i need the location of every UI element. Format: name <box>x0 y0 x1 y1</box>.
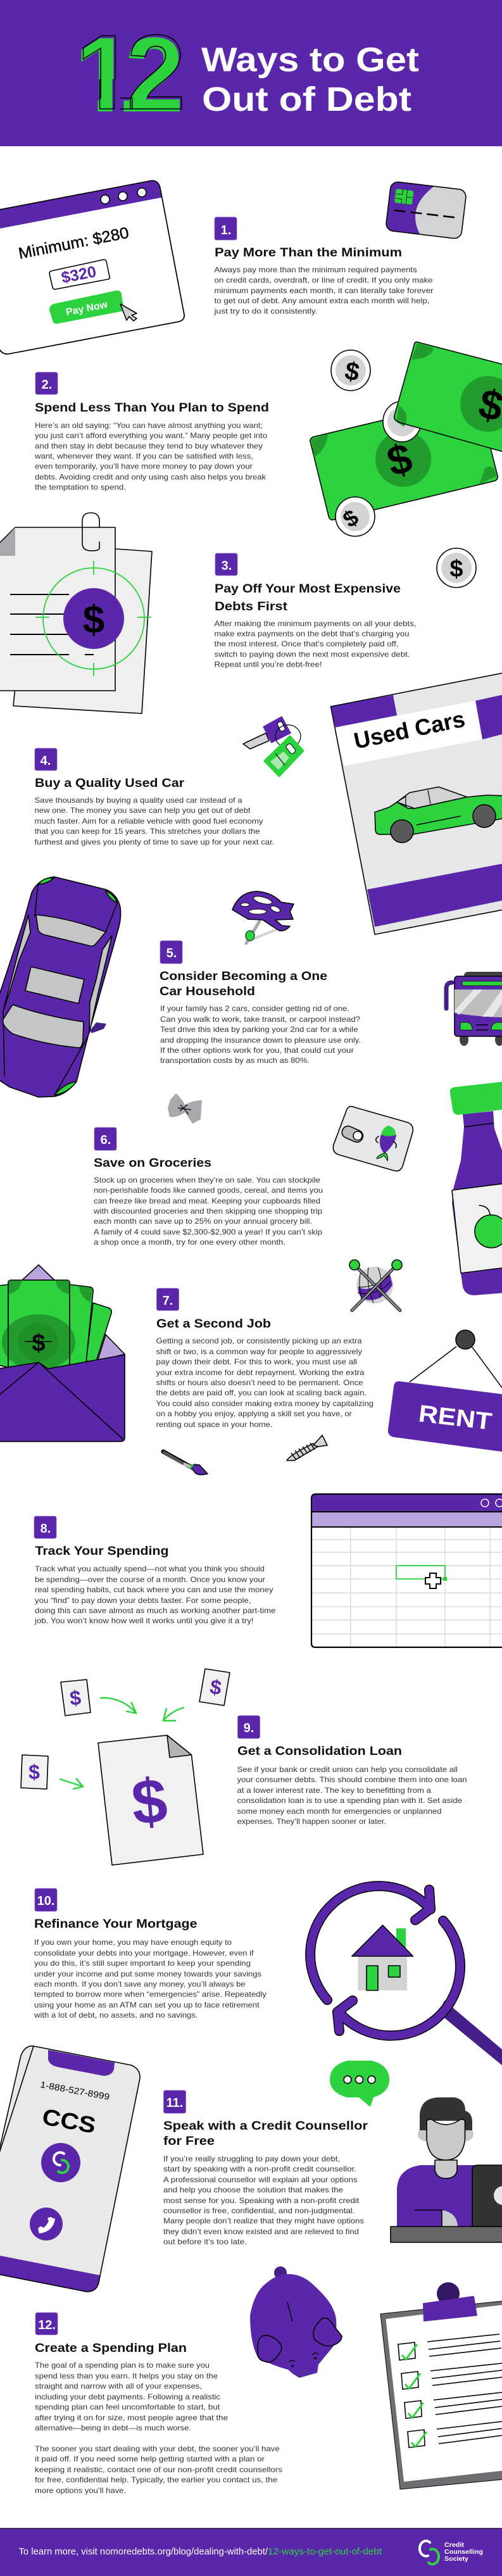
icon: sardine can <box>333 1107 413 1171</box>
heading 5: Consider Becoming a One <box>160 969 327 983</box>
badge 12 <box>35 2313 58 2335</box>
body 12: it paid off. If you need some help getting started with a plan or <box>35 2454 265 2463</box>
badge 1: 1. <box>221 223 231 237</box>
badge 9 <box>238 1716 260 1738</box>
badge 5 <box>160 941 182 964</box>
body 4: that you can keep for 15 years. This stretches your dollars the <box>34 827 260 836</box>
icon: speech bubble <box>330 2061 389 2107</box>
step 7 <box>156 1288 373 1429</box>
body 1: just try to do it consistently. <box>213 307 318 316</box>
heading 6: Save on Groceries <box>94 1156 211 1170</box>
badge 11 <box>163 2090 186 2113</box>
badge 7 <box>157 1288 179 1310</box>
body 3: the most interest. Once that’s completely paid off, <box>214 639 399 648</box>
body 2: Here’s an old saying: “You can have almost anything you want; <box>35 421 263 430</box>
arrow C <box>60 1778 83 1789</box>
large document: $ <box>129 1765 170 1838</box>
illustration: phone showing CCS: CCS <box>41 2104 97 2139</box>
illustration: credit card <box>386 181 467 239</box>
body 8 <box>34 1564 276 1625</box>
heading 3: Debts First <box>215 600 288 613</box>
body 4: Save thousands by buying a quality used car instead of a <box>34 796 242 805</box>
footer <box>0 2528 502 2576</box>
heading 11: for Free <box>163 2134 215 2148</box>
logo circle <box>41 2143 80 2182</box>
title: Ways to Get <box>201 41 419 79</box>
illustration: payment window: Pay Now <box>65 299 109 318</box>
body 10: If you own your home, you may have enough equity to <box>34 1938 232 1947</box>
badge 8 <box>34 1516 56 1538</box>
header banner <box>0 0 502 146</box>
body 12: for free, confidential help. Typically, the earlier you contact us, the <box>35 2475 277 2484</box>
body 10: under your income and put some money towards your savings <box>34 1970 261 1978</box>
heading 1: Pay More Than the Minimum <box>215 246 402 260</box>
small document A: $ <box>69 1686 82 1710</box>
body 4 <box>34 796 275 846</box>
illustration: used cars poster <box>330 672 502 934</box>
illustration: piggy bank <box>250 2266 342 2378</box>
body 12 <box>35 2361 282 2495</box>
body 5: Can you walk to work, take transit, or carpool instead? <box>160 1015 360 1024</box>
body 10: tempted to borrow more when “emergencies” arise. Repeatedly <box>34 1990 267 1999</box>
body 11 <box>163 2154 364 2246</box>
body 2 <box>34 421 267 492</box>
bill lower <box>310 398 498 520</box>
body 6: Stock up on groceries when they’re on sale. You can stockpile <box>94 1176 320 1184</box>
large document <box>98 1735 203 1865</box>
icon: bicycle helmet <box>232 891 294 943</box>
body 7 <box>156 1336 373 1429</box>
title <box>201 41 419 118</box>
body 9: See if your bank or credit union can help you consolidate all <box>237 1765 458 1774</box>
coin middle <box>383 401 421 442</box>
body 6: a shop once a month, try for one every other month. <box>94 1238 286 1247</box>
illustration: counsellor at desk <box>391 2097 502 2242</box>
small document B <box>199 1669 230 1706</box>
footer logo: Counselling <box>444 2548 483 2556</box>
small document B: $ <box>208 1675 223 1699</box>
small document A <box>61 1680 91 1716</box>
body 8: be spending—over the course of a month. Once you know your <box>35 1575 265 1584</box>
body 7: on a hobby you enjoy, applying a skill set you have, or <box>156 1409 352 1418</box>
body 1 <box>213 265 433 316</box>
body 7: the debts are paid off, you can look at scaling back again. <box>156 1388 367 1397</box>
badge 9: 9. <box>244 1721 254 1735</box>
body 1: on credit cards, overdraft, or line of credit. If you only make <box>214 275 433 284</box>
step 2 <box>34 372 269 492</box>
body 3: Repeat until you’re debt-free! <box>214 660 322 669</box>
body 1: Always pay more than the minimum required payments <box>214 265 417 274</box>
big number 12: 12 <box>74 15 184 134</box>
illustration: refinance house with arrows <box>310 1886 502 2069</box>
body 12: more options you’ll have. <box>35 2486 126 2495</box>
body 9: expenses. They’ll happen sooner or later. <box>237 1817 386 1826</box>
body 4: furthest and gives you plenty of time to save up for your next car. <box>34 838 275 846</box>
body 6: with discounted groceries and then skipping one shopping trip <box>93 1207 322 1216</box>
body 6 <box>93 1176 323 1247</box>
body 9: some money each month for emergencies or unplanned <box>237 1807 442 1816</box>
step 9 <box>237 1716 467 1826</box>
step 11 <box>163 2090 368 2246</box>
body 2: and then stay in debt because they tend to buy whatever they <box>35 442 263 451</box>
badge 8: 8. <box>41 1522 51 1536</box>
heading 8: Track Your Spending <box>35 1544 168 1558</box>
body 11: they didn’t even know existed and are relieved to find <box>163 2227 359 2236</box>
illustration: targeted debt papers: $ <box>83 598 104 642</box>
body 11: counsellor is free, confidential, and non-judgmental. <box>163 2206 355 2215</box>
body 10 <box>34 1938 267 2020</box>
badge 4 <box>35 748 57 770</box>
checklist items <box>398 2334 502 2447</box>
body 5: transportation costs by as much as 80%. <box>160 1056 310 1065</box>
body 5: Test drive this idea by parking your 2nd car for a while <box>160 1025 358 1034</box>
step 12 <box>35 2313 282 2495</box>
big number 12 <box>81 34 182 111</box>
illustration: phone showing CCS <box>0 2046 140 2292</box>
illustration: used cars poster: Used Cars <box>351 706 467 754</box>
body 7: your extra income for debt repayment. Working the extra <box>156 1368 365 1377</box>
body 6: non-perishable foods like canned goods, cereal, and items you <box>94 1186 323 1195</box>
icon: bus <box>446 972 502 1046</box>
heading 3: Pay Off Your Most Expensive <box>215 582 401 596</box>
badge 6: 6. <box>101 1133 111 1147</box>
badge 7: 7. <box>163 1294 173 1308</box>
big number 12: 12 <box>76 13 185 132</box>
heading 4: Buy a Quality Used Car <box>35 776 184 790</box>
icon: screw <box>287 1435 327 1461</box>
illustration: envelope full of money: $ <box>32 1330 46 1357</box>
badge 12: 12. <box>38 2318 56 2332</box>
body 7: You could also consider making extra money by capitalizing <box>156 1399 373 1408</box>
badge 2 <box>35 372 58 394</box>
body 12: keeping it realistic, contact one of our non-profit credit counsellors <box>35 2465 282 2474</box>
heading 11: Speak with a Credit Counsellor <box>163 2119 368 2133</box>
heading 11 <box>163 2119 368 2148</box>
badge 6 <box>94 1128 116 1150</box>
heading 5: Car Household <box>160 984 255 998</box>
small document C: $ <box>28 1761 40 1783</box>
illustration: envelope full of money <box>0 1265 125 1442</box>
body 10: using your home as an ATM can set you up to face retirement <box>34 2001 260 2009</box>
body 1: to get out of debt. Any amount extra each month will help, <box>214 296 429 305</box>
body 9 <box>237 1765 467 1826</box>
body 8: you “find” to pay down your debts faster. For some people, <box>35 1596 251 1605</box>
icon: yarn and needles <box>349 1260 402 1310</box>
body 8: real spending habits, cut back where you can and use the money <box>35 1585 273 1594</box>
step 4 <box>34 748 275 846</box>
body 10: with a lot of debt, no assets, and no savings. <box>34 2011 198 2020</box>
body 11: most sense for you. Speaking with a non-profit credit <box>163 2196 360 2205</box>
body 2: you just can’t afford everything you want.” Many people get into <box>35 431 267 440</box>
illustration: payment window: Minimum: $280 <box>17 224 130 263</box>
badge 3 <box>215 553 237 575</box>
badge 5: 5. <box>166 946 177 960</box>
body 12: alternative—being in debt—is much worse. <box>35 2423 191 2432</box>
body 11: If you’re really struggling to pay down your debt, <box>163 2154 340 2163</box>
body 12: spend less than you earn. It helps you stay on the <box>35 2372 218 2380</box>
footer link text: 12-ways-to-get-out-of-debt <box>268 2546 382 2557</box>
icon: car keys <box>243 717 303 776</box>
step 8 <box>34 1516 276 1625</box>
icon: bottle <box>450 1081 502 1295</box>
car <box>375 787 502 843</box>
arrow A <box>100 1698 136 1713</box>
body 6: A family of 4 could save $2,300-$2,900 a year! If you can’t skip <box>94 1228 322 1236</box>
body 11: A professional counsellor will explain all your options <box>163 2175 357 2184</box>
badge 10 <box>35 1888 57 1911</box>
body 10: you do this, it’s still super important to keep your spending <box>34 1959 251 1968</box>
body 11: Many people don’t realize that they might have options <box>163 2216 364 2225</box>
step 3 <box>214 553 417 669</box>
body 5: If the other options work for you, that could cut your <box>160 1046 354 1055</box>
body 8: job. You won’t know how well it works until you give it a try! <box>34 1616 254 1625</box>
body 12: The sooner you start dealing with your debt, the sooner you’ll have <box>35 2444 280 2453</box>
small document C <box>21 1755 48 1789</box>
coin top <box>331 350 370 391</box>
illustration: purple car from above <box>0 877 121 1097</box>
footer logo: Society <box>444 2555 468 2563</box>
body 7: Getting a second job, or consistently picking up an extra <box>156 1336 362 1345</box>
arrow B <box>163 1707 184 1721</box>
magnifier handle <box>439 2001 502 2069</box>
body 4: new one. The money you save can help you get out of debt <box>34 806 251 815</box>
phone button <box>30 2208 63 2240</box>
body 3: switch to paying down the next most expensive debt. <box>214 650 410 659</box>
bill lower: $ <box>382 434 417 485</box>
body 6: can freeze like bread and meat. Keeping your cupboards filled <box>94 1197 320 1205</box>
body 12: spending plan can feel uncomfortable to start, but <box>35 2403 220 2411</box>
body 7: renting out space in your home. <box>156 1420 272 1429</box>
body 2: debts. Avoiding credit and only using cash also helps you break <box>35 473 267 482</box>
illustration: debts consolidated into one document <box>21 1669 230 1865</box>
body 6: each month can save up to 25% on your annual grocery bill. <box>94 1217 312 1226</box>
body 1: minimum payments each month, it can literally take forever <box>214 286 433 295</box>
body 12: after trying it on for size, most people agree that the <box>35 2413 228 2422</box>
body 12: including your debt payments. Following a realistic <box>35 2392 220 2401</box>
body 5: and dropping the insurance down to pleasure use only. <box>160 1036 361 1045</box>
body 3: make extra payments on the debt that’s charging you <box>214 629 409 638</box>
icon: rent sign: RENT <box>417 1400 493 1435</box>
body 5: If your family has 2 cars, consider getting rid of one. <box>160 1004 349 1013</box>
coin bottom <box>336 497 375 536</box>
body 9: at a lower interest rate. The key to benefitting from a <box>237 1786 431 1795</box>
body 3: After making the minimum payments on all your debts, <box>214 619 417 628</box>
step 10 <box>34 1888 267 2020</box>
coin bottom: $ <box>338 504 363 532</box>
body 10: each month. If you don’t save any money, you’ll always be <box>34 1980 246 1989</box>
heading 3 <box>215 582 401 613</box>
badge 11: 11. <box>166 2096 183 2110</box>
step 6 <box>93 1128 323 1247</box>
heading 2: Spend Less Than You Plan to Spend <box>35 401 269 415</box>
heading 10: Refinance Your Mortgage <box>34 1917 198 1931</box>
body 8: Track what you actually spend—not what you think you should <box>35 1564 265 1573</box>
body 2: even temporarily, you’ll have more money to pay down your <box>35 462 253 471</box>
footer logo <box>420 2541 483 2564</box>
illustration: bills and coins <box>310 342 502 587</box>
body 7: shift or two, is a common way for people to aggressively <box>156 1347 362 1356</box>
coin top: $ <box>342 357 361 387</box>
body 5 <box>160 1004 361 1065</box>
illustration: targeted debt papers <box>0 513 152 713</box>
body 9: consolidation loan is to use a spending plan with it. Set aside <box>237 1796 462 1805</box>
body 2: want, whenever they want. If you can be satisfied with less, <box>34 452 253 461</box>
bill upper <box>394 342 502 453</box>
title: Out of Debt <box>202 80 411 118</box>
body 3 <box>214 619 417 669</box>
footer link text: To learn more, visit nomoredebts.org/blog/dealing-with-debt/ <box>19 2546 268 2557</box>
body 8: doing this can save almost as much as working another part-time <box>35 1606 276 1615</box>
coin right <box>437 548 476 587</box>
heading 12: Create a Spending Plan <box>35 2341 187 2355</box>
step 5 <box>160 941 361 1065</box>
illustration: phone showing CCS: 1-888-527-8999 <box>39 2079 111 2102</box>
body 11: out before it’s too late. <box>163 2237 247 2246</box>
body 11: start by speaking with a non-profit credit counsellor. <box>163 2164 356 2173</box>
illustration: payment window <box>0 180 184 354</box>
body 4: much faster. Aim for a reliable vehicle with good fuel economy <box>34 817 263 826</box>
illustration: spreadsheet <box>311 1494 502 1647</box>
illustration: clipboard checklist <box>380 2282 502 2489</box>
heading 5 <box>160 969 327 998</box>
coin right: $ <box>449 556 463 582</box>
body 10: consolidate your debts into your mortgage. However, even if <box>34 1949 254 1957</box>
step 1 <box>213 217 433 316</box>
body 9: your consumer debts. This should combine them into one loan <box>237 1775 467 1784</box>
footer logo: Credit <box>444 2541 465 2549</box>
badge 10: 10. <box>37 1894 54 1908</box>
body 12: The goal of a spending plan is to make sure you <box>35 2361 210 2370</box>
body 12: straight and narrow with all of your expenses, <box>35 2382 202 2391</box>
body 7: pay down their debt. For this to work, you must use all <box>156 1357 357 1366</box>
icon: bowtie pasta <box>168 1093 202 1124</box>
icon: rent sign <box>388 1330 502 1452</box>
badge 2: 2. <box>42 378 52 392</box>
heading 7: Get a Second Job <box>156 1317 271 1331</box>
house <box>352 1925 413 1990</box>
badge 4: 4. <box>41 754 51 768</box>
body 2: the temptation to spend. <box>35 483 126 492</box>
heading 9: Get a Consolidation Loan <box>237 1744 402 1758</box>
footer link text <box>19 2546 382 2557</box>
badge 3: 3. <box>222 559 232 573</box>
body 11: and help you choose the solution that makes the <box>163 2185 343 2194</box>
illustration: payment window: $320 <box>60 263 97 287</box>
icon: paintbrush <box>163 1452 208 1475</box>
badge 1 <box>215 217 237 240</box>
body 7: shifts or hours also doesn’t need to be permanent. Once <box>156 1378 363 1387</box>
circular arrows <box>310 1886 460 2035</box>
